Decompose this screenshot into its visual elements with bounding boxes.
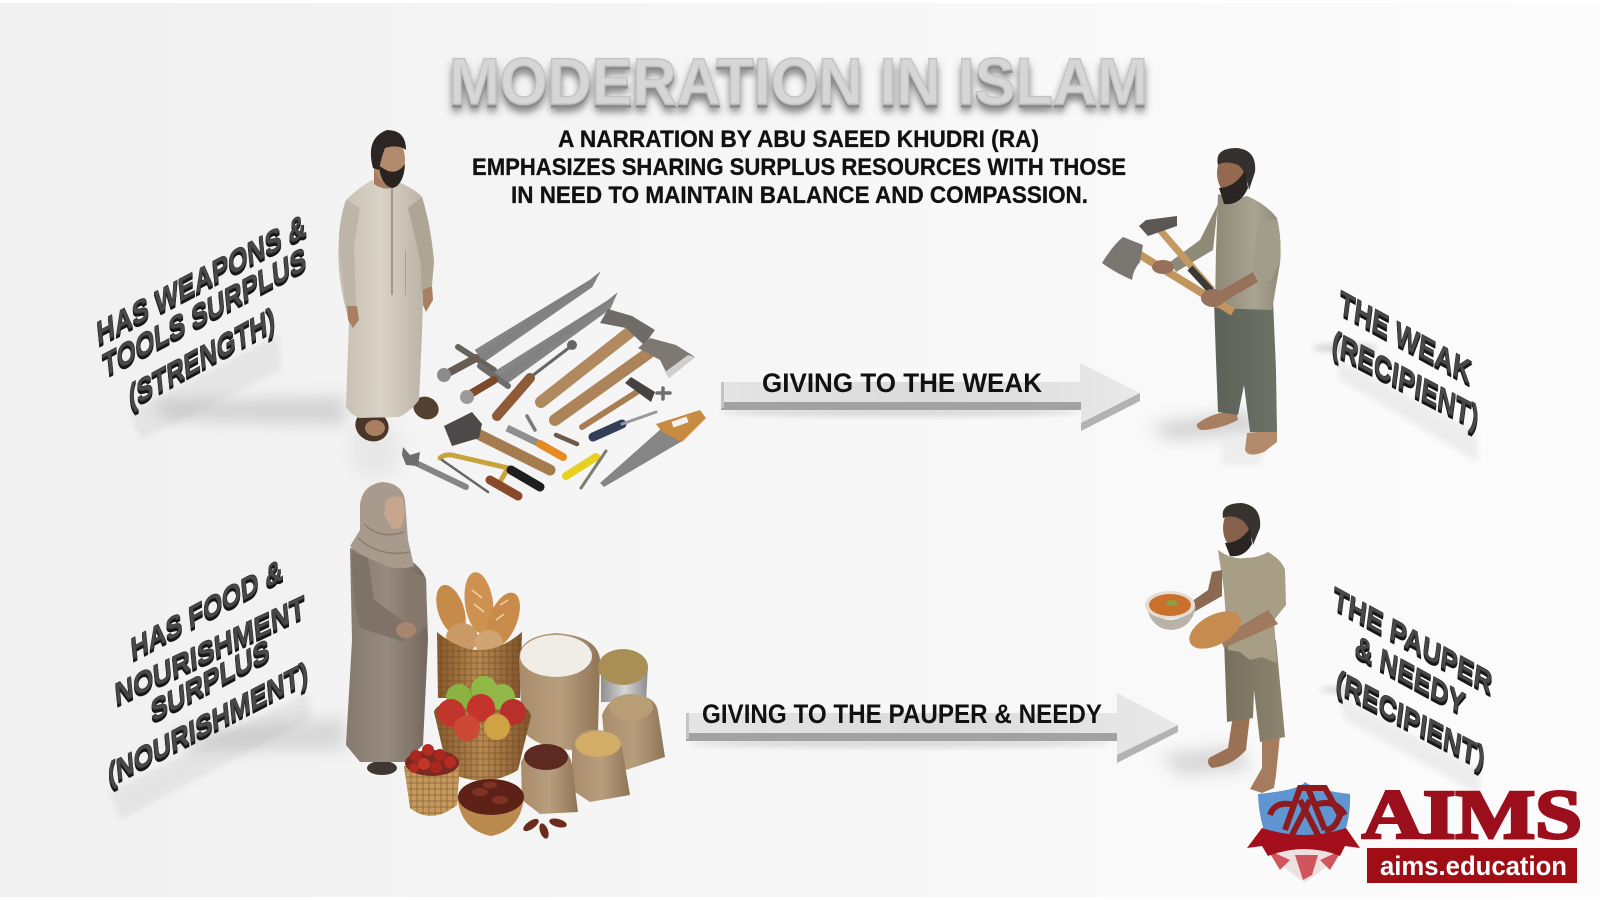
- yellow knife and pencil: [566, 451, 606, 488]
- arrow label: GIVING TO THE WEAK: [762, 368, 1042, 398]
- saw: [600, 410, 706, 487]
- sack: beans: [521, 744, 578, 814]
- arrow label: GIVING TO THE PAUPER & NEEDY: [702, 699, 1102, 729]
- label: the pauper and needy recipient: (RECIPIENT): [1334, 664, 1487, 776]
- sack: millet: [572, 730, 630, 802]
- loose dates: [521, 817, 568, 840]
- label: the weak recipient: THE WEAK: [1337, 283, 1473, 391]
- dates bowl: [457, 779, 524, 836]
- bread basket: [431, 570, 527, 698]
- label: has weapons and tools surplus: HAS WEAPONS &: [95, 206, 308, 352]
- narration text block: [472, 126, 1126, 209]
- figure: the weak recipient holding axe and hammer: [1102, 148, 1281, 465]
- sandals: [350, 405, 394, 447]
- narration text block: A NARRATION BY ABU SAEED KHUDRI (RA): [558, 126, 1039, 153]
- trousers: [1224, 640, 1285, 742]
- label: has weapons and tools surplus: [95, 206, 345, 440]
- axe 2: [555, 338, 695, 420]
- label: has food and nourishment surplus: SURPLUS: [149, 633, 271, 729]
- wrench: [402, 447, 466, 487]
- shield emblem: [1247, 782, 1360, 882]
- small parts: [527, 388, 670, 444]
- dagger: [497, 340, 577, 416]
- hijab: [350, 482, 414, 568]
- arrow: giving to the pauper and needy: [686, 693, 1178, 763]
- label: the weak recipient: (RECIPIENT): [1330, 323, 1481, 436]
- food pile: [404, 570, 665, 840]
- AIMS wordmark: AIMS: [1362, 777, 1582, 854]
- hands: [347, 306, 359, 328]
- head: [374, 168, 399, 189]
- shirt: [1215, 194, 1281, 310]
- arrow: giving to the weak: [720, 363, 1140, 431]
- axe 1: [541, 309, 655, 402]
- narration text block: EMPHASIZES SHARING SURPLUS RESOURCES WITH THOSE: [472, 154, 1126, 181]
- orange chisel: [507, 428, 563, 457]
- arms: [1188, 570, 1222, 612]
- label: has weapons and tools surplus: TOOLS SURPLUS: [101, 240, 308, 384]
- axe and hammer: [1137, 253, 1233, 312]
- label: has food and nourishment surplus: [106, 553, 345, 820]
- shoes: [367, 761, 397, 775]
- tools and weapons pile: [402, 272, 706, 496]
- label: the pauper and needy recipient: [1320, 581, 1494, 795]
- sack: grain: [602, 694, 665, 770]
- label: the pauper and needy recipient: & NEEDY: [1353, 629, 1467, 722]
- grain tin: [598, 649, 648, 702]
- label: has food and nourishment surplus: NOURISHMENT: [113, 589, 307, 712]
- figure: man with surplus: [338, 130, 442, 480]
- sword 2: [460, 293, 617, 404]
- face: [384, 496, 405, 529]
- sword 1: [437, 272, 600, 382]
- robe: [338, 180, 434, 418]
- label: the weak recipient: [1313, 283, 1481, 462]
- figure: woman with surplus: [346, 482, 428, 775]
- rice sack: [519, 633, 600, 750]
- small hammer: [582, 377, 655, 427]
- trousers: [1214, 300, 1277, 432]
- label: has food and nourishment surplus: HAS FOOD &: [129, 553, 284, 667]
- small fruit basket: [404, 744, 460, 816]
- head: [1223, 506, 1253, 550]
- title: MODERATION IN ISLAM: [449, 44, 1148, 118]
- logo: AIMS: [1247, 777, 1582, 883]
- narration text block: IN NEED TO MAINTAIN BALANCE AND COMPASSION.: [511, 182, 1088, 209]
- figure: the pauper recipient with bowl and bread: [1145, 503, 1286, 793]
- website box: aims.education: [1380, 851, 1567, 881]
- legs and feet: [1208, 715, 1250, 768]
- arms: [352, 552, 410, 642]
- bowl of food: [1145, 591, 1196, 630]
- bread loaf: [1183, 604, 1247, 656]
- sledgehammer: [444, 412, 550, 470]
- label: has food and nourishment surplus: (NOURISHMENT): [106, 656, 309, 792]
- shirt: [1218, 550, 1286, 663]
- hacksaw: [440, 455, 540, 496]
- dress: [346, 548, 428, 762]
- label: the pauper and needy recipient: THE PAUPER: [1331, 581, 1494, 701]
- head: [1217, 150, 1249, 196]
- feet: [1197, 411, 1238, 430]
- screwdriver: [593, 412, 656, 437]
- apple basket: [434, 676, 531, 781]
- label: has weapons and tools surplus: (STRENGTH): [127, 300, 276, 415]
- arms: [1170, 204, 1218, 272]
